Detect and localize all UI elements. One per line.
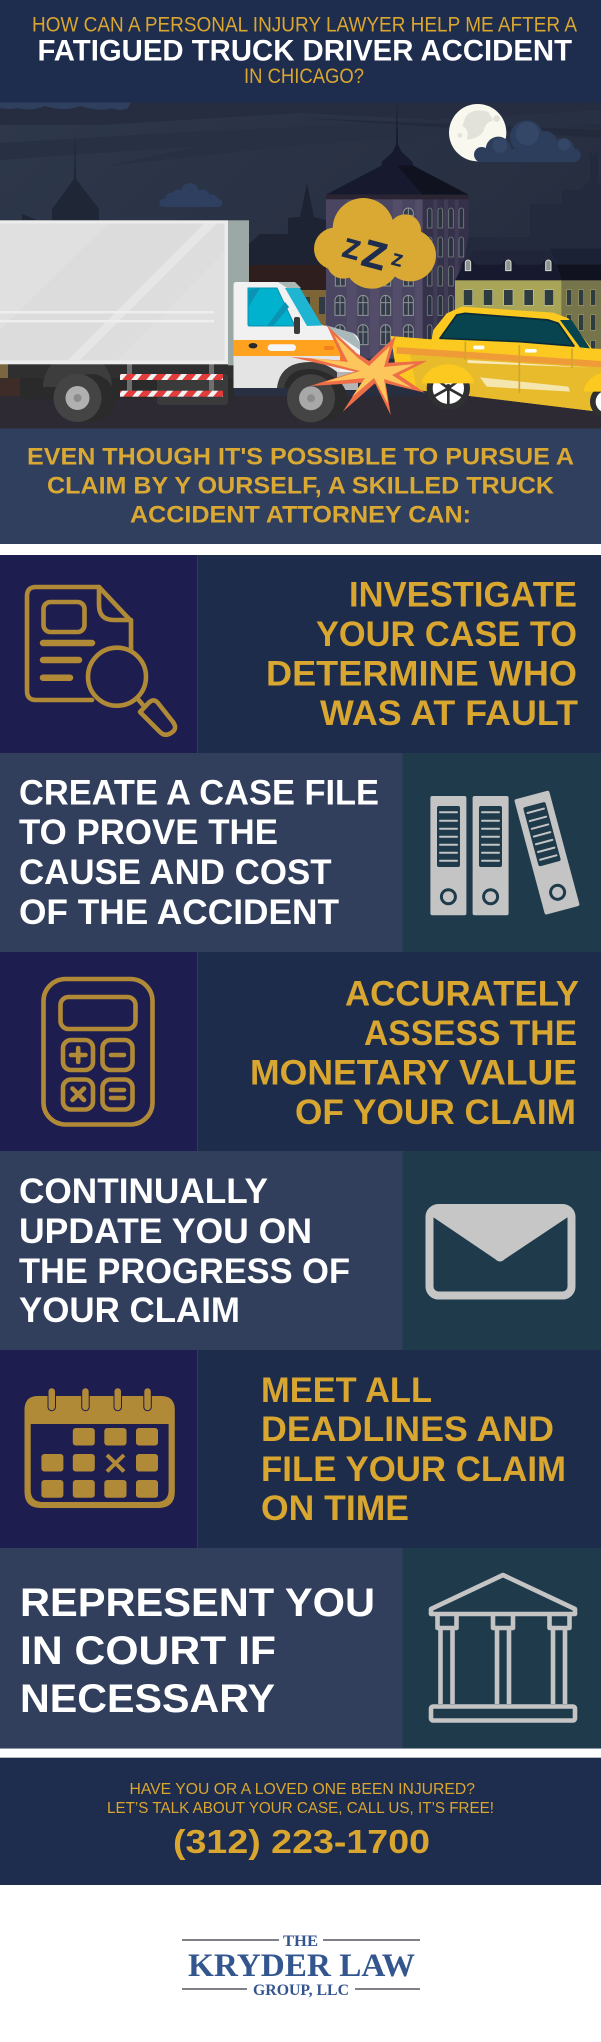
text: deadlines: MEET ALL — [261, 1371, 432, 1410]
truck — [0, 220, 360, 422]
binder 3 — [514, 790, 580, 915]
text: investigate: YOUR CASE TO — [316, 615, 577, 654]
text: investigate: DETERMINE WHO — [266, 654, 577, 694]
road — [0, 396, 601, 429]
text: deadlines: ON TIME — [261, 1489, 409, 1528]
crash explosion — [290, 325, 427, 415]
subheading line 3: ACCIDENT ATTORNEY CAN: — [130, 502, 471, 528]
rear wheel — [54, 374, 115, 422]
logo: The Kryder Law Group: THE — [283, 1933, 318, 1950]
title line 2: FATIGUED TRUCK DRIVER ACCIDENT — [38, 35, 572, 68]
footer call to action — [0, 1757, 601, 1885]
panel: assess value — [0, 952, 601, 1151]
brown building — [0, 265, 326, 398]
small cloud — [159, 183, 222, 207]
yellow building — [455, 237, 601, 354]
text: progress updates: THE PROGRESS OF — [19, 1252, 350, 1291]
yellow car — [391, 307, 601, 418]
text: represent in court — [20, 1581, 375, 1721]
text: investigate — [266, 576, 578, 733]
icon: document and magnifying glass — [27, 587, 175, 735]
rear wheel arch — [43, 364, 112, 387]
illustration: truck and car crash at night — [0, 102, 601, 429]
header banner — [0, 0, 601, 102]
car wheel — [422, 364, 601, 412]
text: represent in court: IN COURT IF — [20, 1629, 276, 1673]
logo: The Kryder Law Group: KRYDER LAW — [188, 1948, 415, 1984]
binder 1 — [430, 796, 466, 915]
text: assess value: OF YOUR CLAIM — [295, 1093, 576, 1132]
title line 3: IN CHICAGO? — [244, 65, 364, 88]
text: investigate: WAS AT FAULT — [320, 694, 578, 733]
text: progress updates: UPDATE YOU ON — [19, 1212, 312, 1251]
text: deadlines: DEADLINES AND — [261, 1410, 554, 1449]
logo: The Kryder Law Group — [182, 1933, 420, 1999]
panel: progress updates — [0, 1151, 601, 1350]
cloud top left — [0, 102, 131, 110]
icon: binders — [430, 790, 580, 915]
text: case file: TO PROVE THE — [19, 813, 278, 852]
text: assess value — [250, 975, 579, 1132]
subheading line 1: EVEN THOUGH IT'S POSSIBLE TO PURSUE A — [27, 444, 574, 470]
text: case file: OF THE ACCIDENT — [19, 893, 339, 932]
text: assess value: ACCURATELY — [345, 975, 579, 1014]
chassis — [8, 364, 234, 405]
panel: case file — [0, 753, 601, 952]
front wheel — [277, 362, 347, 422]
cloud in front of moon — [474, 120, 581, 162]
panel: represent in court — [0, 1548, 601, 1749]
CTA line 1: HAVE YOU OR A LOVED ONE BEEN INJURED? — [130, 1781, 475, 1798]
night sky — [0, 102, 601, 428]
text: represent in court: REPRESENT YOU — [20, 1581, 375, 1625]
text: assess value: MONETARY VALUE — [250, 1054, 577, 1093]
subheading line 2: CLAIM BY Y OURSELF, A SKILLED TRUCK — [47, 472, 555, 500]
text: progress updates: YOUR CLAIM — [19, 1291, 240, 1330]
text: deadlines — [261, 1371, 566, 1528]
cab — [234, 282, 360, 390]
sleep bubble zZz: Z — [358, 233, 391, 279]
logo: The Kryder Law Group: GROUP, LLC — [253, 1982, 349, 1999]
text: progress updates: CONTINUALLY — [19, 1172, 268, 1211]
icon: courthouse — [431, 1575, 575, 1720]
icon: envelope — [430, 1208, 572, 1296]
sleep bubble zZz — [314, 198, 436, 289]
distant skyline — [22, 144, 326, 265]
text: case file — [19, 774, 379, 932]
phone number: (312) 223-1700 — [173, 1823, 430, 1860]
text: represent in court: NECESSARY — [20, 1677, 275, 1721]
cargo box — [0, 220, 249, 365]
text: investigate: INVESTIGATE — [349, 576, 577, 615]
text: assess value: ASSESS THE — [364, 1014, 577, 1053]
subheading band — [0, 428, 601, 544]
text: case file: CREATE A CASE FILE — [19, 774, 379, 813]
text: case file: CAUSE AND COST — [19, 853, 332, 892]
CTA line 2: LET’S TALK ABOUT YOUR CASE, CALL US, IT’S FREE! — [107, 1800, 494, 1817]
binder 2 — [473, 796, 509, 915]
tower with windows — [326, 102, 468, 359]
sleep bubble zZz: Z — [390, 250, 405, 271]
text: progress updates — [19, 1172, 350, 1330]
icon: calendar — [24, 1388, 175, 1508]
moon — [449, 104, 506, 161]
icon: calculator — [44, 979, 152, 1124]
sleep bubble zZz: Z — [340, 233, 363, 266]
panel: investigate — [0, 555, 601, 753]
text: deadlines: FILE YOUR CLAIM — [261, 1450, 566, 1489]
panel: deadlines — [0, 1350, 601, 1548]
hazard bars — [120, 374, 223, 397]
